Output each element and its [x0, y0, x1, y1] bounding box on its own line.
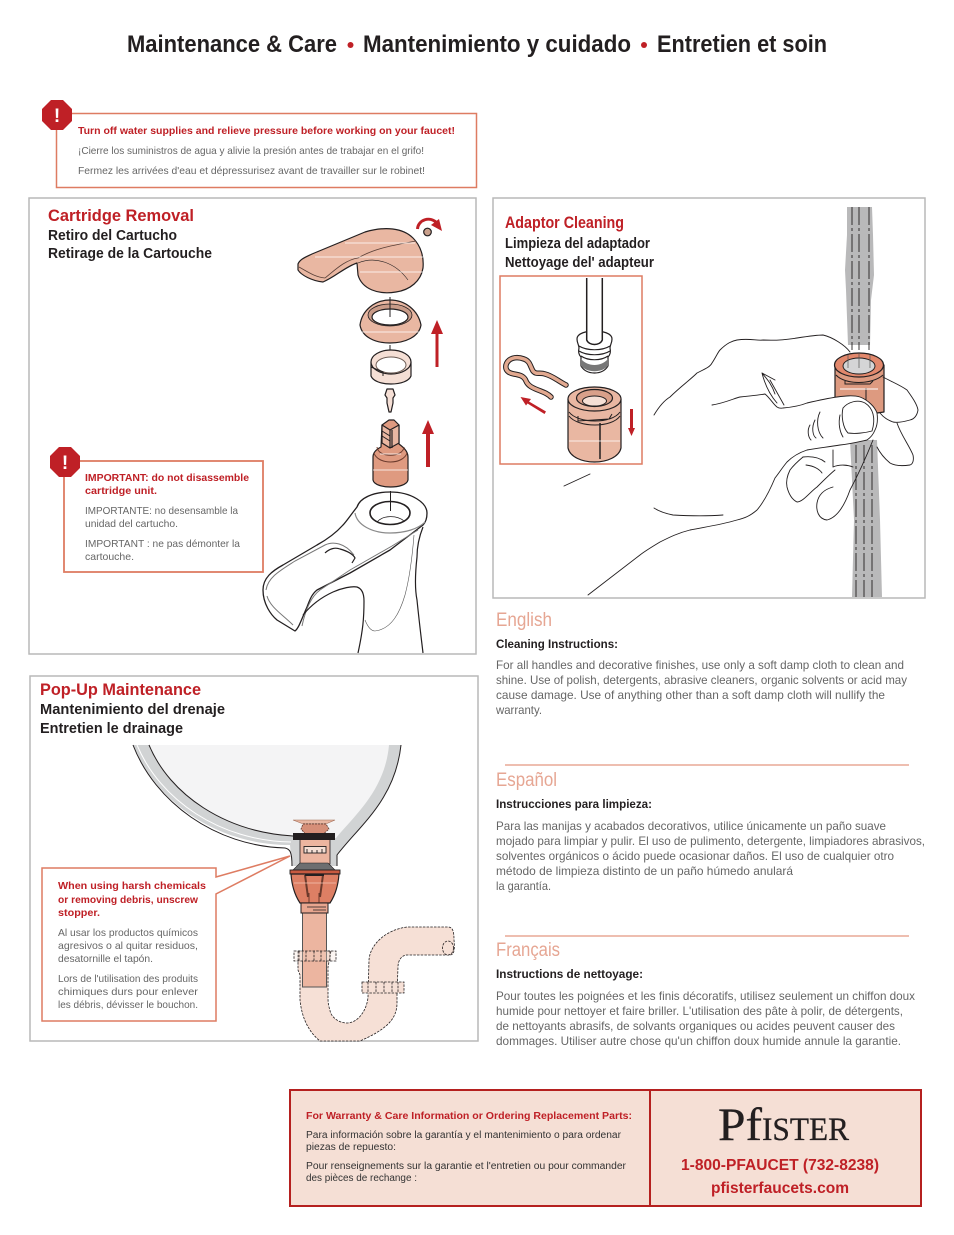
heading: adaptor cleaning: Limpieza del adaptador [505, 236, 650, 252]
callout: important [50, 447, 263, 572]
warning callout: ¡Cierre los suministros de agua y alivie la presión antes de trabajar en el grifo! [78, 145, 424, 157]
callout: harsh chemicals: stopper. [58, 907, 100, 919]
text block: English: For all handles and decorative finishes, use only a soft damp cloth to clean and [496, 658, 904, 672]
callout: important: IMPORTANT: do not disassemble [85, 472, 249, 484]
drain assembly [290, 820, 340, 913]
text block: Español [496, 770, 925, 893]
heading: pop-up maintenance [40, 680, 225, 737]
warranty text: des pièces de rechange : [306, 1173, 417, 1184]
arrow: clip removal [520, 397, 546, 414]
slip nuts [294, 951, 404, 993]
warranty text: Para información sobre la garantía y el mantenimiento o para ordenar [306, 1130, 622, 1141]
callout: harsh chemicals: les débris, dévisser le bouchon. [58, 999, 198, 1011]
arrow: up lift handle [431, 320, 443, 367]
collar [360, 300, 421, 343]
heading: pop-up maintenance: Mantenimiento del drenaje [40, 702, 225, 718]
arrow: up lift cartridge [422, 420, 434, 467]
callout: important: unidad del cartucho. [85, 518, 178, 530]
sink and drain diagram [133, 745, 454, 1041]
text block: Español: Para las manijas y acabados decorativos, utilice únicamente un paño suave [496, 819, 886, 833]
text block: Español: Español [496, 770, 557, 791]
heading: cartridge removal: Cartridge Removal [48, 206, 194, 225]
text block: English: Cleaning Instructions: [496, 639, 618, 651]
text block: English: warranty. [495, 703, 542, 717]
callout: important: IMPORTANT : ne pas démonter la [85, 538, 240, 550]
heading: adaptor cleaning: Nettoyage del' adapteur [505, 255, 654, 271]
warning callout: Fermez les arrivées d'eau et dépressurisez avant de travailler sur le robinet! [78, 165, 425, 177]
heading: pop-up maintenance: Pop-Up Maintenance [40, 680, 201, 699]
inset: adaptor detail [500, 276, 642, 464]
callout: harsh chemicals: Lors de l'utilisation des produits [58, 973, 198, 985]
callout: harsh chemicals: agresivos o al quitar residuos, [58, 940, 198, 952]
heading: cartridge removal [48, 206, 212, 262]
text block: Français: humide pour nettoyer et faire briller. L'utilisation des pâte à polir, de détergents, [496, 1004, 903, 1018]
heading: pop-up maintenance: Entretien le drainage [40, 721, 183, 737]
text block: Español: solventes orgánicos o ácido puede ocasionar daños. El uso de cualquier otro [496, 849, 894, 863]
title: Entretien et soin [657, 31, 827, 58]
sink basin [133, 745, 401, 866]
warranty text: Pour renseignements sur la garantie et l'entretien ou pour commander [306, 1161, 627, 1172]
heading: adaptor cleaning: Adaptor Cleaning [505, 213, 624, 232]
logo: Pfister [718, 1099, 849, 1151]
contact: phone and website: pfisterfaucets.com [711, 1180, 849, 1197]
text block: Español: mojado para limpiar y pulir. El uso de pulimento, detergente, limpiadores abrasivos, [496, 834, 925, 848]
title: Mantenimiento y cuidado [363, 31, 631, 58]
text block: Français: Français [496, 940, 560, 961]
callout: harsh chemicals: desatornille el tapón. [58, 953, 153, 965]
arrow: down [628, 409, 635, 436]
callout: harsh chemicals: or removing debris, unscrew [58, 894, 199, 906]
text block: Español: la garantía. [496, 879, 551, 893]
aerator stem [577, 278, 612, 373]
text block: Español: Instrucciones para limpieza: [496, 799, 652, 811]
callout: harsh chemicals: Al usar los productos químicos [58, 927, 198, 939]
retaining clip [506, 358, 566, 397]
screw [385, 389, 395, 412]
text block: Français [496, 940, 915, 1048]
footer panel: warranty and contact [290, 1090, 921, 1206]
callout: harsh chemicals [42, 856, 290, 1021]
ring [371, 362, 411, 384]
logo: Pfister: Pf [718, 1099, 762, 1151]
callout: important: cartridge unit. [85, 485, 157, 497]
callout: harsh chemicals: When using harsh chemicals [58, 880, 206, 892]
text block: Français: Instructions de nettoyage: [496, 969, 643, 981]
warranty text: For Warranty & Care Information or Ordering Replacement Parts: [306, 1110, 632, 1122]
tailpiece [302, 913, 326, 987]
contact: phone and website [681, 1157, 879, 1197]
text block: English: shine. Use of polish, detergents, abrasive cleaners, organic solvents or acid may [496, 673, 907, 687]
panel: adaptor cleaning [493, 198, 925, 598]
trap pipe [298, 927, 454, 1041]
heading: adaptor cleaning [505, 213, 654, 271]
adaptor body [568, 387, 621, 462]
icon: warning octagon: ! [62, 453, 68, 474]
warning callout: Turn off water supplies and relieve pressure before working on your faucet! [78, 125, 455, 137]
icon: warning octagon: ! [54, 106, 60, 127]
title [127, 31, 827, 58]
icon: warning octagon [42, 100, 72, 130]
exploded cartridge diagram [263, 219, 442, 653]
callout: harsh chemicals: chimiques durs pour enlever [58, 986, 199, 998]
contact: phone and website: 1-800-PFAUCET (732-8238) [681, 1157, 879, 1174]
text block: Français: de nettoyants abrasifs, de solvants organiques ou acides peuvent causer des [496, 1019, 895, 1033]
faucet body [263, 492, 427, 631]
hand outline [564, 335, 918, 595]
title: Maintenance & Care [127, 31, 337, 58]
panel: cartridge removal [29, 198, 476, 654]
water stream [845, 207, 882, 597]
cartridge [373, 420, 408, 487]
heading: cartridge removal: Retirage de la Cartouche [48, 246, 212, 262]
text block: English [495, 610, 907, 717]
text block: English: cause damage. Use of anything other than a soft damp cloth will nullify the [496, 688, 885, 702]
adaptor in hand [834, 353, 884, 414]
logo: Pfister: ISTER [762, 1112, 849, 1148]
warning callout [42, 100, 476, 188]
warranty text: piezas de repuesto: [306, 1142, 396, 1153]
heading: cartridge removal: Retiro del Cartucho [48, 228, 177, 244]
text block: English: English [496, 610, 552, 631]
icon: warning octagon [50, 447, 80, 477]
text block: Français: Pour toutes les poignées et les finis décoratifs, utilisez seulement un chiffon doux [496, 989, 915, 1003]
text block: Français: dommages. Utiliser autre chose qu'un chiffon doux humide annule la garantie. [496, 1034, 901, 1048]
text block: Español: método de limpieza distinto de un paño húmedo anulará [496, 864, 793, 878]
warranty text [306, 1110, 632, 1184]
handle [298, 229, 423, 293]
callout: important: cartouche. [85, 551, 134, 563]
hand holding adaptor illustration [564, 207, 918, 597]
callout: important: IMPORTANTE: no desensamble la [85, 505, 238, 517]
panel: pop-up maintenance [30, 676, 478, 1041]
icon: rotate arrow and set screw [418, 219, 442, 236]
